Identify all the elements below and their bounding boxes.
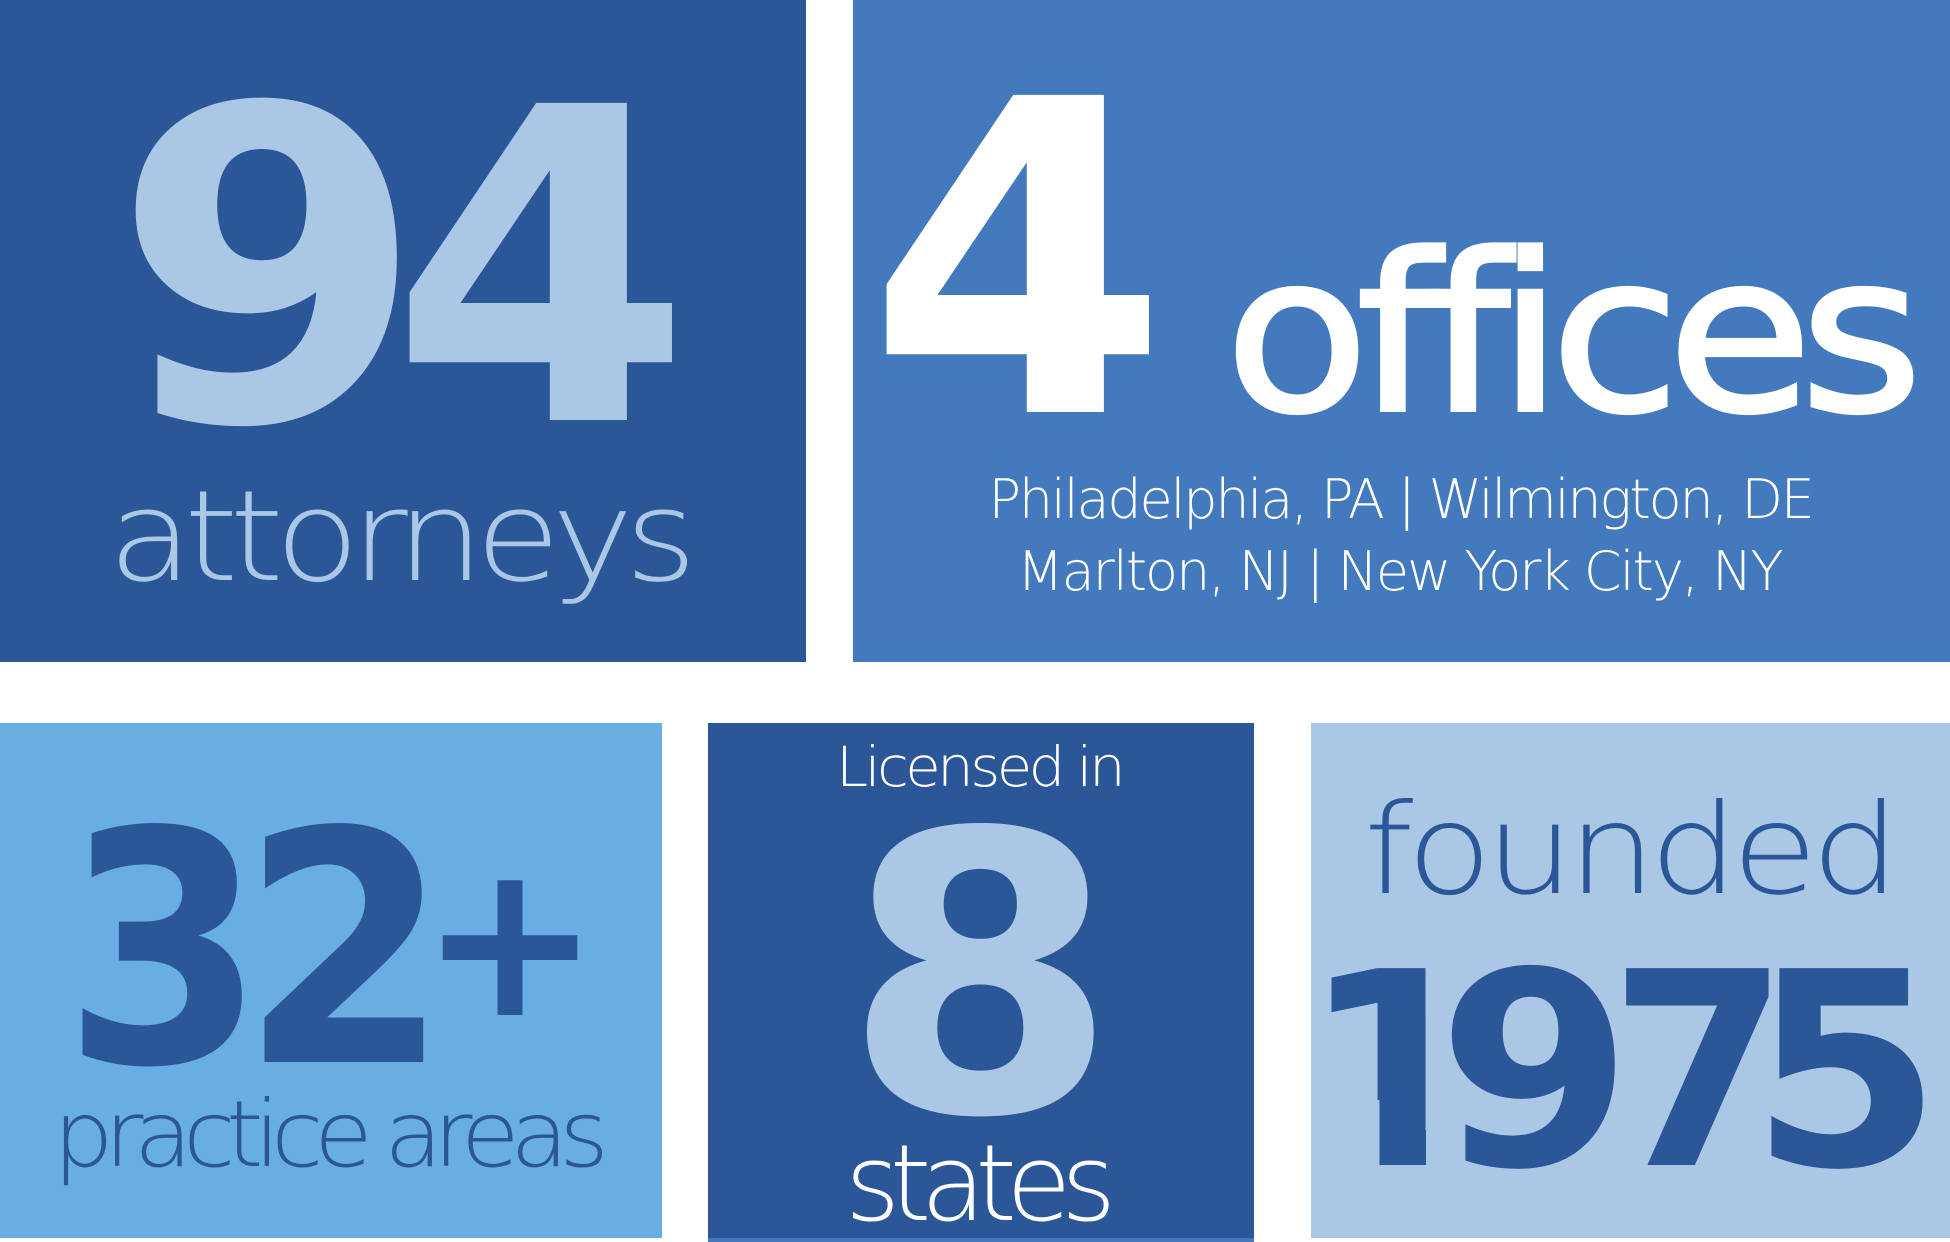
panel: founded (1301, 723, 1950, 1238)
panel: practice areas (0, 723, 662, 1238)
year 1975: 7 (1609, 915, 1789, 1229)
big number 32+: 2 (241, 764, 449, 1139)
office locations line 1: Philadelphia, PA | Wilmington, DE (988, 468, 1813, 531)
label: Licensed in: Licensed in (836, 736, 1122, 800)
label: offices: offices (1225, 207, 1912, 462)
panel: attorneys (0, 0, 806, 662)
panel: licensed states (708, 723, 1254, 1242)
big number 8: 8 (843, 752, 1118, 1203)
year 1975: 1 (1301, 914, 1489, 1229)
label: attorneys: attorneys (108, 464, 688, 610)
big number 94 (112, 17, 692, 523)
big number 4: 4 (867, 9, 1169, 515)
big number 32+ (63, 764, 600, 1139)
year 1975 (1332, 964, 1923, 1169)
panel: offices (853, 0, 1950, 662)
label: founded: founded (1364, 778, 1893, 923)
label: states: states (845, 1122, 1109, 1242)
big number 94: 9 (112, 17, 426, 523)
big number 94: 4 (390, 17, 692, 523)
big number 32+: + (420, 815, 600, 1066)
year 1975: 9 (1437, 914, 1633, 1229)
office locations line 2: Marlton, NJ | New York City, NY (1017, 540, 1782, 603)
big number 32+: 3 (63, 765, 265, 1139)
year 1975: 5 (1750, 916, 1942, 1229)
label: practice areas: practice areas (53, 1082, 603, 1189)
